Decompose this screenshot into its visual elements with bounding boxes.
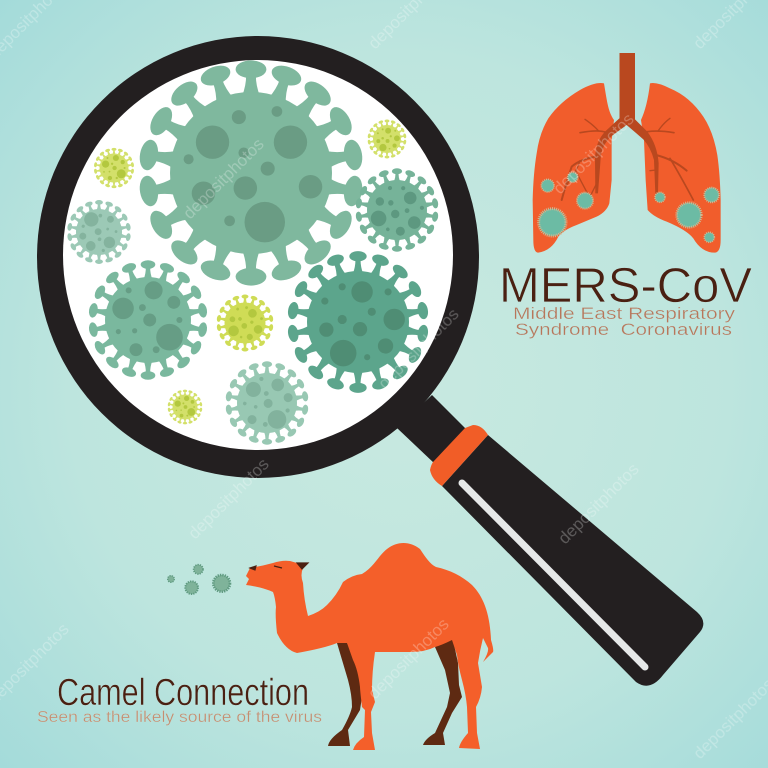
heading: Camel Connection: Camel Connection [57,672,309,714]
virus lower left [88,260,208,380]
exhaled viruses [168,565,230,594]
subtitle line 1: Middle East Respiratory [513,304,736,323]
watermarks: depositphotos [374,305,463,393]
grip highlight [462,483,645,667]
orange collar [430,425,488,486]
yellow virus 3 [216,295,274,351]
camel [246,543,493,750]
far rear leg [423,635,462,745]
yellow virus 4 [168,390,202,424]
watermarks: depositphotos [179,135,268,223]
watermarks: depositphotos [549,110,638,198]
watermarks: depositphotos [554,460,643,548]
left lung [533,83,614,253]
virus left pale [67,200,131,264]
trachea [620,53,635,121]
right lung [641,83,721,253]
subtitle line 2: Syndrome Coronavirus [515,320,732,339]
yellow virus 2 [367,120,407,158]
lungs [533,53,721,253]
virus bottom pale [225,361,309,445]
dark virus [287,251,429,393]
watermarks: depositphotos [364,615,453,703]
handle neck [397,395,467,464]
lung virus spots [539,172,719,242]
yellow virus 1 [94,148,134,188]
far front leg [328,643,362,746]
large virus [137,60,365,286]
caption: Seen as the likely source of the virus [37,709,322,726]
handle grip [442,435,703,686]
magnifying glass [37,36,703,686]
nose, eye and ear [250,563,308,570]
title: MERS-CoV: MERS-CoV [499,259,752,313]
camel body [246,543,493,750]
lens ring and glass [37,36,479,478]
bronchi [562,118,693,200]
watermarks: depositphotos [184,455,273,543]
virus right [355,168,439,252]
